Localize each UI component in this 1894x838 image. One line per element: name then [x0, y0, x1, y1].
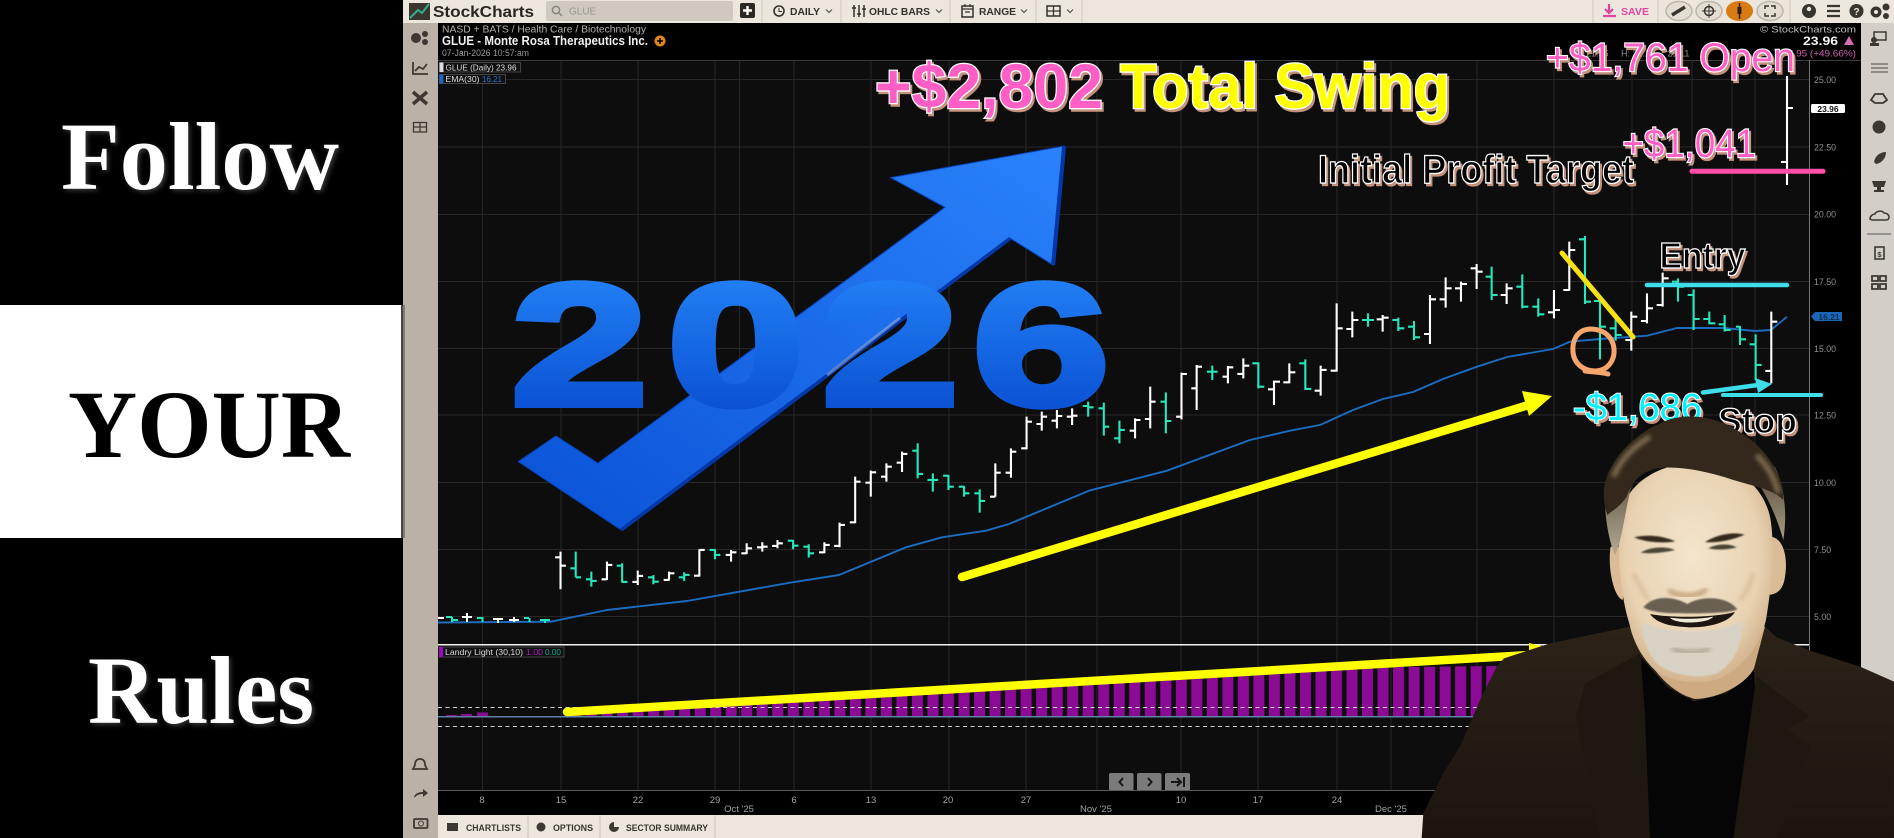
t-shirt — [1641, 657, 1755, 838]
menu: OHLC bars — [852, 5, 942, 18]
legend: EMA: 16.21 — [482, 74, 502, 84]
arrow — [518, 146, 1064, 530]
icon: grid — [1872, 276, 1886, 289]
percent change: +7.95 (+49.66%) — [1782, 48, 1856, 60]
icon: globe — [1872, 120, 1886, 134]
legend: EMA — [440, 74, 506, 84]
menu: layout — [1047, 6, 1073, 16]
temples — [1605, 467, 1785, 555]
menu: daily: DAILY — [790, 6, 820, 18]
OHLC readout: 21.95 H: 25.24 21.11 — [1586, 48, 1689, 58]
icon: sliders — [1871, 64, 1888, 72]
day labels: 6 — [791, 795, 797, 806]
icon: line chart — [413, 62, 428, 74]
icon: presentation — [1870, 32, 1886, 46]
axis labels: 25.00 — [1814, 75, 1836, 85]
goatee — [1643, 620, 1742, 676]
heading: YOUR: YOUR — [68, 371, 352, 478]
day labels: 22 — [633, 795, 643, 806]
axis labels — [1814, 75, 1836, 622]
heading: Rules: Rules — [88, 637, 314, 744]
legend: Landry Light (30,10) — [445, 647, 523, 657]
neck — [1638, 627, 1765, 699]
annotation: entry: Entry — [1660, 235, 1746, 276]
icon: settings gears — [411, 31, 428, 45]
annotation: open profit: +$1,761 Open — [1546, 36, 1795, 80]
icon: document — [1875, 247, 1884, 259]
chart header — [438, 24, 1861, 84]
graphic: 2026 with rising arrow — [511, 146, 1109, 530]
annotation: initial profit target: Initial Profit Target — [1318, 148, 1634, 192]
teeth — [1670, 617, 1713, 623]
symbol title: GLUE - Monte Rosa Therapeutics Inc. — [442, 34, 648, 48]
trend line: pullback — [1562, 253, 1633, 337]
axis labels: 22.50 — [1814, 142, 1836, 152]
annotation: total swing headline — [875, 52, 1450, 122]
nav buttons — [1109, 773, 1190, 791]
tab: chartlists — [447, 823, 521, 834]
panel: slogan column — [0, 0, 403, 838]
arrow: yellow uptrend — [962, 391, 1552, 577]
right tool sidebar icons — [1867, 32, 1891, 289]
search box: GLUE — [569, 6, 597, 18]
divider — [438, 644, 1809, 646]
menu: range — [962, 4, 1027, 18]
axis labels: 7.50 — [1814, 545, 1831, 555]
yellow trend arrow — [567, 643, 1550, 712]
month labels: Nov '25 — [1080, 804, 1112, 815]
legend: price: GLUE (Daily) 23.96 — [446, 62, 517, 72]
month labels: Dec '25 — [1375, 804, 1407, 815]
annotation: stop: Stop — [1718, 402, 1797, 441]
dashed levels — [438, 708, 1640, 726]
day labels: 20 — [943, 795, 953, 806]
heading: Follow: Follow — [61, 103, 339, 210]
moustache — [1643, 598, 1737, 613]
icon: bell — [413, 759, 427, 769]
eyebrows — [1634, 533, 1745, 542]
last price tag: 23.96 — [1817, 104, 1839, 114]
day labels: 15 — [556, 795, 566, 806]
last price — [1803, 34, 1854, 48]
goatee shadow — [1672, 648, 1710, 652]
eyes — [1641, 544, 1737, 553]
day labels: 17 — [1253, 795, 1263, 806]
month labels — [724, 804, 1407, 815]
jacket — [1422, 627, 1894, 838]
icon: cloud network — [1871, 94, 1887, 103]
tab: sector summary: SECTOR SUMMARY — [626, 823, 709, 834]
menu: range: RANGE — [979, 6, 1016, 18]
EMA tag — [1811, 312, 1842, 322]
swing label: Total Swing — [1120, 52, 1450, 122]
legend — [440, 647, 564, 657]
mark: orange Q circle — [1573, 329, 1614, 374]
white band — [0, 305, 401, 538]
presenter portrait — [1422, 416, 1894, 838]
histogram bars — [446, 665, 1600, 717]
nose shading — [1668, 589, 1707, 596]
bottom tabs — [447, 815, 715, 838]
mouth — [1650, 612, 1735, 627]
divider — [1867, 234, 1891, 235]
EMA line — [438, 317, 1787, 622]
lapels — [1576, 653, 1812, 838]
icon: trophy — [1872, 181, 1886, 192]
icon: account menu help gears — [1802, 4, 1890, 19]
swing amount: +$2,802 — [875, 52, 1103, 122]
cheek shading — [1633, 573, 1753, 600]
tab: options — [536, 822, 593, 834]
icon: rocket — [1874, 152, 1886, 164]
day labels — [479, 795, 1342, 806]
icon: share arrow — [414, 789, 428, 798]
icon: camera — [414, 819, 428, 828]
save button: SAVE — [1621, 6, 1649, 18]
annotation: target profit: +$1,041 — [1622, 122, 1756, 166]
price bars: January — [1579, 236, 1777, 383]
annotation: loss amount: -$1,686 — [1573, 387, 1702, 429]
icon: cloud — [1870, 211, 1889, 220]
date stamp: 07-Jan-2026 10:57:am — [442, 48, 529, 58]
last price tag — [1811, 104, 1845, 114]
date axis — [438, 790, 1809, 815]
day labels: 10 — [1176, 795, 1186, 806]
EMA tag: 16.21 — [1818, 312, 1840, 322]
year text: 2026 — [511, 249, 1109, 442]
chart grid lines — [438, 60, 1809, 790]
price axis — [1809, 60, 1845, 790]
last price: 23.96 — [1803, 34, 1838, 48]
menu: daily — [774, 6, 832, 18]
axis labels: 20.00 — [1814, 210, 1836, 220]
menu: OHLC bars: OHLC BARS — [869, 6, 930, 18]
icon: document: $ — [1877, 250, 1882, 259]
left tool sidebar icons — [411, 31, 428, 828]
search box — [546, 1, 733, 21]
ears — [1610, 536, 1786, 600]
icon: StockCharts logo — [409, 3, 430, 20]
icon: add symbol — [654, 36, 666, 46]
save button — [1603, 4, 1649, 18]
axis labels: 10.00 — [1814, 478, 1836, 488]
icon: account menu help gears: ? — [1853, 7, 1860, 18]
target line — [1692, 169, 1823, 174]
top toolbar — [409, 0, 1890, 23]
legend: 0.00 — [545, 647, 561, 657]
hair — [1604, 416, 1783, 515]
day labels: 8 — [479, 795, 485, 806]
tab: chartlists: CHARTLISTS — [466, 823, 521, 834]
icon: tool buttons — [1666, 1, 1783, 21]
face — [1619, 463, 1773, 682]
day labels: 24 — [1332, 795, 1342, 806]
arrow shadow edge across digit — [827, 318, 900, 375]
legend: 1.00 — [526, 647, 543, 657]
panel: chart background and frame — [401, 0, 1894, 838]
price bars: September to December — [555, 365, 1233, 589]
toolbar dividers — [762, 0, 1790, 23]
price bars: early flat range — [438, 613, 550, 623]
signal line — [438, 716, 1638, 718]
legend: EMA: EMA(30) — [446, 74, 480, 84]
icon: tools — [413, 92, 427, 104]
axis labels: 17.50 — [1814, 277, 1836, 287]
stop line — [1723, 393, 1821, 397]
day labels: 13 — [866, 795, 876, 806]
axis labels: 12.50 — [1814, 410, 1836, 420]
brand name: StockCharts — [433, 4, 534, 21]
icon: layout grid — [414, 122, 426, 132]
panel: Landry Light indicator — [438, 643, 1809, 791]
exchange path: NASD + BATS / Health Care / Biotechnology — [442, 24, 646, 36]
arrow: stop pointer — [1703, 378, 1772, 393]
month labels: Oct '25 — [724, 804, 754, 815]
axis labels: 5.00 — [1814, 612, 1831, 622]
axis labels: 15.00 — [1814, 344, 1836, 354]
tab: options: OPTIONS — [553, 823, 593, 834]
day labels: 29 — [710, 795, 720, 806]
icon: add button — [740, 3, 755, 18]
copyright: © StockCharts.com — [1760, 24, 1856, 36]
hair highlights — [1613, 437, 1778, 493]
price bars: December — [1237, 242, 1575, 405]
entry line — [1647, 283, 1787, 287]
price bar: gap day — [1781, 76, 1793, 185]
day labels: 27 — [1021, 795, 1031, 806]
